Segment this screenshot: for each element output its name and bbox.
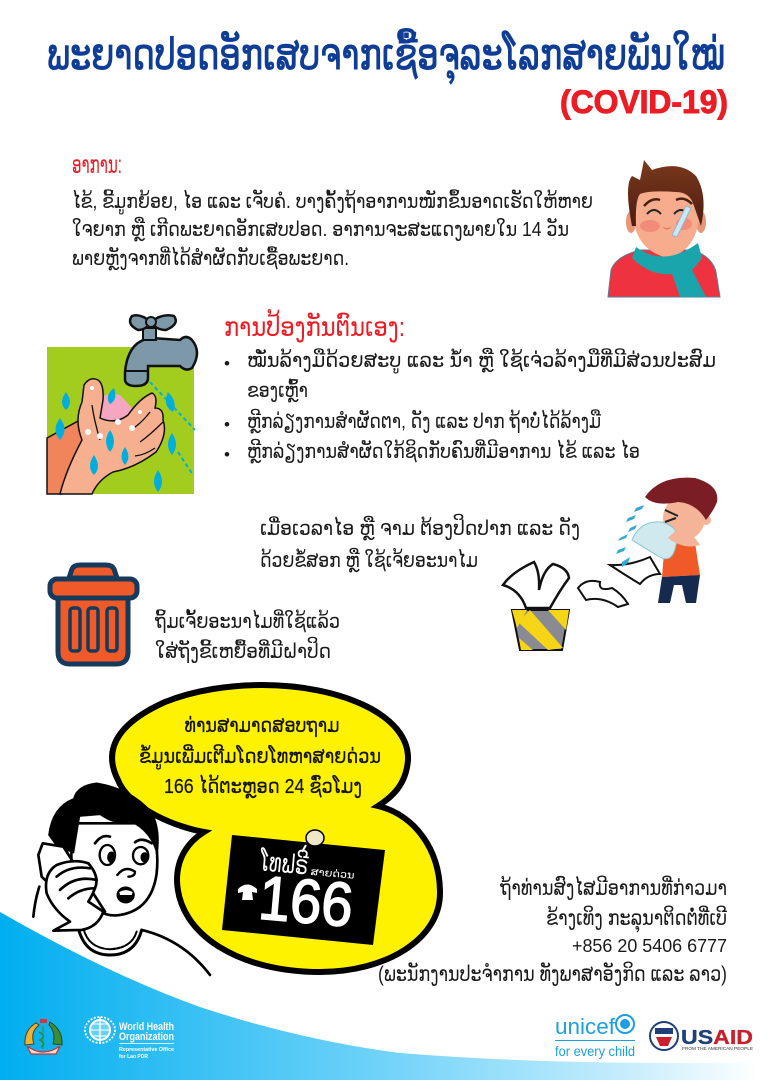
text block: cough advice: ດ້ວຍຂໍ້ສອກ ຫຼື ໃຊ້ເຈ້ຍອະນາໄມ: [260, 548, 478, 573]
speech bubble: hotline: [112, 685, 440, 972]
logo: USAID: FROM THE AMERICAN PEOPLE: [682, 1046, 753, 1051]
logo: World Health Organization: World Health: [119, 1021, 174, 1033]
footer blue wave: [0, 912, 775, 1080]
bubble text: 166 ໄດ້ຕະຫຼອດ 24 ຊົ່ວໂມງ: [164, 775, 362, 799]
heading: symptoms: ອາການ:: [72, 151, 122, 179]
logo: unicef: unicef: [555, 1014, 616, 1039]
list: protection measures: [224, 348, 716, 464]
list: protection measures: •: [224, 415, 230, 434]
text block: contact details: ຖ້າທ່ານສົງໄສມີອາການທີ່ກ່າວມາ: [499, 875, 727, 900]
heading: self protection: ການປ້ອງກັນຕົນເອງ:: [224, 308, 405, 342]
logo: USAID: USAID: [681, 1027, 753, 1049]
text block: symptoms: ພາຍຫຼັງຈາກທີ່ໄດ້ສຳຜັດກັບເຊື້ອພະຍາດ.: [72, 246, 349, 271]
logo: World Health Organization: Representative Office: [119, 1047, 174, 1053]
logo: unicef: [555, 1014, 635, 1059]
text block: contact details: [378, 875, 727, 986]
bubble text: ຂໍ້ມູນເພີ່ມເຕີມໂດຍໂທຫາສາຍດ່ວນ: [139, 744, 381, 770]
icon: tissue box and sneezing man: [503, 478, 717, 650]
text block: contact details: ຂ້າງເທິງ ກະລຸນາຕິດຕໍ່ທີ່ເບີ: [546, 905, 727, 933]
list: protection measures: ຫຼີກລ່ຽງການສຳຜັດໃກ້ຊິດກັບຄົນທີ່ມີອາການ ໄຂ້ ແລະ ໄອ: [247, 439, 640, 464]
text block: symptoms: ໄຂ້, ຂີ້ມູກຍ້ອຍ, ໄອ ແລະ ເຈັບຄໍ. ບາງຄັ້ງຖ້າອາການໜັກຂຶ້ນອາດເຮັດໃຫ້ຫາຍ: [72, 189, 593, 215]
list: protection measures: ໝັ່ນລ້າງມືດ້ວຍສະບູ ແລະ ນ້ຳ ຫຼື ໃຊ້ເຈ່ວລ້າງມືທີ່ມີສ່ວນປະສົມ: [247, 348, 716, 374]
logo: USAID: [650, 1022, 753, 1051]
logo: World Health Organization: for Lao PDR: [119, 1054, 148, 1060]
bubble text: [139, 715, 381, 799]
list: protection measures: •: [224, 354, 230, 373]
logo: Lao Ministry of Health: [25, 1019, 62, 1054]
icon: hand washing under faucet: [47, 315, 197, 494]
text block: dispose of tissue: ຖິ້ມເຈັ້ຍອະນາໄມທີ່ໃຊ້ແລ້ວ: [154, 609, 340, 633]
logo: World Health Organization: [85, 1017, 174, 1060]
logo: unicef: for every child: [555, 1044, 635, 1059]
text block: dispose of tissue: ໃສ່ຖັງຂີ້ເຫຍື້ອທີ່ມີຝາປິດ: [155, 637, 331, 663]
icon: telephone: [238, 884, 257, 900]
bubble text: ທ່ານສາມາດສອບຖາມ: [184, 715, 340, 737]
title: (COVID-19): [560, 84, 728, 120]
text block: cough advice: [260, 514, 580, 573]
sign: free hotline 166: ສາຍດ່ວນ: [310, 866, 355, 882]
list: protection measures: ຂອງເຫຼົ້າ: [247, 379, 308, 403]
sign: free hotline 166: 166: [256, 864, 356, 941]
illustration: boy on the phone: [33, 783, 210, 975]
icon: trash bin: [50, 565, 137, 664]
logo: World Health Organization: Organization: [119, 1031, 174, 1043]
text block: cough advice: ເມື່ອເວລາໄອ ຫຼື ຈາມ ຕ້ອງປິດປາກ ແລະ ດັງ: [260, 514, 580, 541]
icon: sick man with thermometer: [608, 160, 720, 297]
text block: dispose of tissue: [154, 609, 340, 663]
text block: symptoms: [72, 189, 593, 271]
text block: symptoms: ໃຈຍາກ ຫຼື ເກີດພະຍາດອັກເສບປອດ. ອາການຈະສະແດງພາຍໃນ 14 ວັນ: [72, 217, 569, 242]
title: [47, 30, 728, 120]
sign: free hotline 166: [222, 830, 385, 945]
list: protection measures: •: [224, 445, 230, 464]
sign: free hotline 166: ໂທຟຣີ: [258, 846, 309, 881]
text block: contact details: +856 20 5406 6777: [572, 936, 727, 956]
list: protection measures: ຫຼີກລ່ຽງການສຳຜັດຕາ, ດັງ ແລະ ປາກ ຖ້າບໍ່ໄດ້ລ້າງມື: [247, 409, 601, 434]
